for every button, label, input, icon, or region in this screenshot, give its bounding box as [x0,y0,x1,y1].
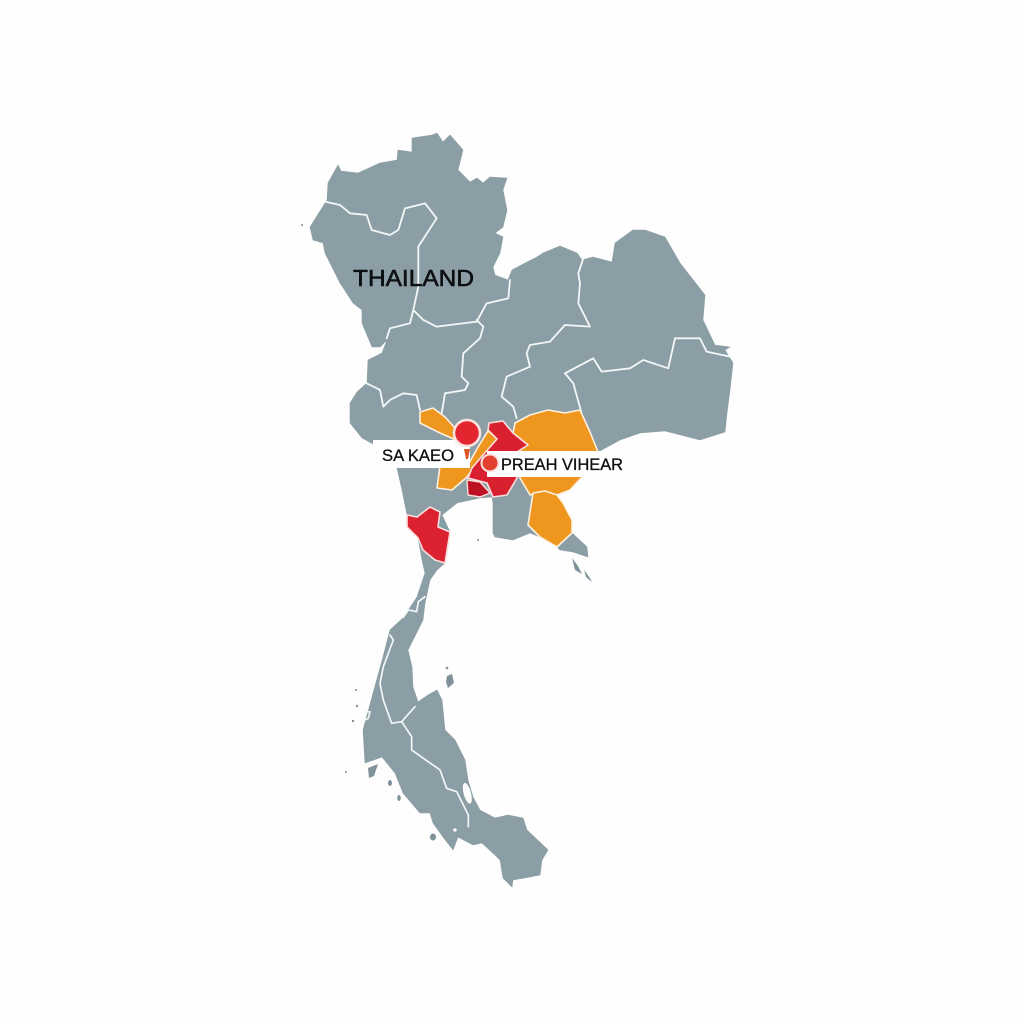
red province: central [468,421,528,497]
dark red province [467,480,490,497]
provincial boundaries: south [365,597,474,832]
label: Preah Vihear [487,451,627,477]
marker: Preah Vihear dot [482,454,498,472]
orange province: central diagonal [437,431,497,490]
inlet near the red province [439,517,449,535]
orange province: large eastern [513,410,598,495]
country silhouette [310,133,733,887]
orange province: upper left [420,408,456,440]
islands [301,224,592,840]
red province: western [407,507,450,563]
label: Sa Kaeo [373,440,470,468]
orange province: south-eastern [528,491,572,547]
label: Sa Kaeo: SA KAEO [382,446,454,465]
title: Thailand: THAILAND [353,265,474,291]
provincial boundaries: north and centre [325,202,730,418]
label: Preah Vihear: PREAH VIHEAR [501,455,623,474]
marker: Sa Kaeo pin [454,420,480,459]
